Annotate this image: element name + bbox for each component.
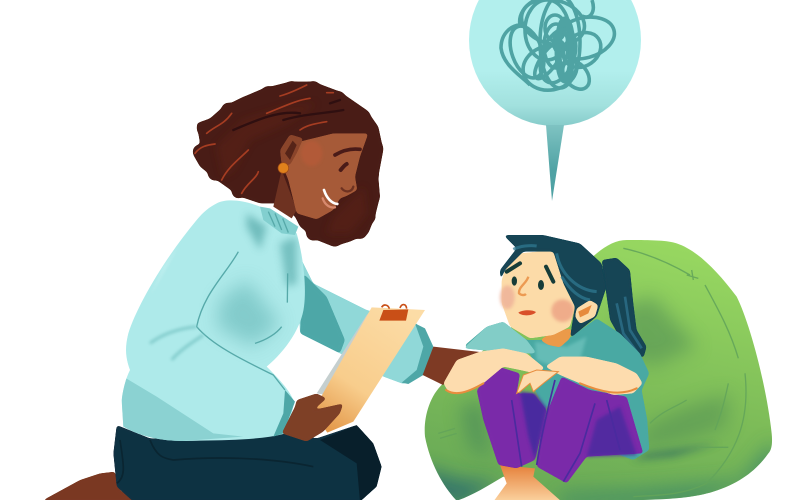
ponytail highlights	[617, 297, 642, 352]
near cuff	[273, 390, 295, 437]
bag seams	[438, 248, 746, 497]
mouth	[518, 310, 536, 315]
fingers	[517, 370, 558, 393]
ponytail	[602, 258, 647, 358]
arm and torso seams	[197, 252, 288, 390]
eyebrows	[507, 263, 553, 282]
inner ear	[578, 305, 592, 317]
neck	[540, 328, 572, 347]
nose shadow	[342, 187, 353, 191]
collar ribs	[268, 212, 288, 233]
far sleeve shading	[300, 273, 345, 353]
far cuff	[402, 323, 433, 384]
curly hair	[193, 81, 383, 247]
hair dark strands	[233, 100, 343, 130]
inner ear	[285, 141, 297, 160]
near leg	[477, 367, 547, 468]
sweater shading	[120, 213, 297, 443]
cheek freckles	[301, 141, 322, 166]
far leg shadow	[587, 407, 637, 457]
lower lip	[323, 198, 335, 208]
closed eye	[341, 164, 347, 170]
bean bag chair	[420, 240, 780, 500]
face	[502, 250, 575, 338]
far sleeve	[297, 250, 433, 384]
smile	[324, 190, 337, 204]
right arm	[545, 357, 643, 395]
far leg	[537, 377, 643, 483]
right cheek	[551, 299, 574, 322]
t-shirt	[463, 318, 649, 460]
clip loops	[382, 305, 407, 309]
clipboard paper edge	[317, 310, 372, 395]
trouser creases	[117, 440, 313, 483]
neck and jaw shadow	[273, 170, 297, 218]
counsellor kneeling with clipboard	[43, 81, 425, 500]
counsellor far arm reaching behind clipboard	[297, 250, 480, 385]
hair	[500, 235, 607, 338]
bubble circle	[469, 0, 641, 126]
left arm	[443, 348, 545, 393]
shirt centre between legs	[533, 367, 563, 410]
trousers	[113, 425, 382, 500]
hair lighter patches	[217, 103, 367, 233]
left cheek	[500, 285, 515, 309]
feet	[493, 465, 562, 500]
face	[282, 133, 368, 219]
trouser shape	[113, 425, 382, 500]
clipboard	[313, 307, 425, 433]
trouser shadow	[320, 425, 382, 500]
trouser seams	[512, 380, 620, 482]
child sitting on the bean bag	[443, 235, 649, 500]
sleeve wrinkles	[150, 327, 203, 360]
bag body	[425, 240, 772, 500]
speech bubble with tangled scribble	[469, 0, 641, 201]
earring	[278, 163, 289, 173]
nose	[519, 277, 528, 295]
tangled scribble	[501, 0, 619, 94]
shirt front	[535, 337, 587, 367]
near hand	[282, 393, 343, 442]
shirt light shoulder	[463, 322, 537, 353]
eyebrow	[335, 149, 360, 155]
eyes	[512, 276, 517, 286]
sweater torso	[122, 200, 305, 441]
ear	[575, 300, 598, 324]
hair highlights	[513, 246, 597, 300]
far hand	[423, 347, 480, 385]
hair highlights	[195, 85, 333, 193]
foot	[43, 472, 137, 500]
bubble tail	[546, 125, 564, 201]
clipboard clip	[379, 309, 408, 321]
sweater collar	[260, 207, 298, 235]
bag shading	[420, 297, 780, 500]
ear	[280, 134, 303, 165]
near leg shadow	[520, 392, 547, 460]
arm undersides	[446, 383, 637, 393]
